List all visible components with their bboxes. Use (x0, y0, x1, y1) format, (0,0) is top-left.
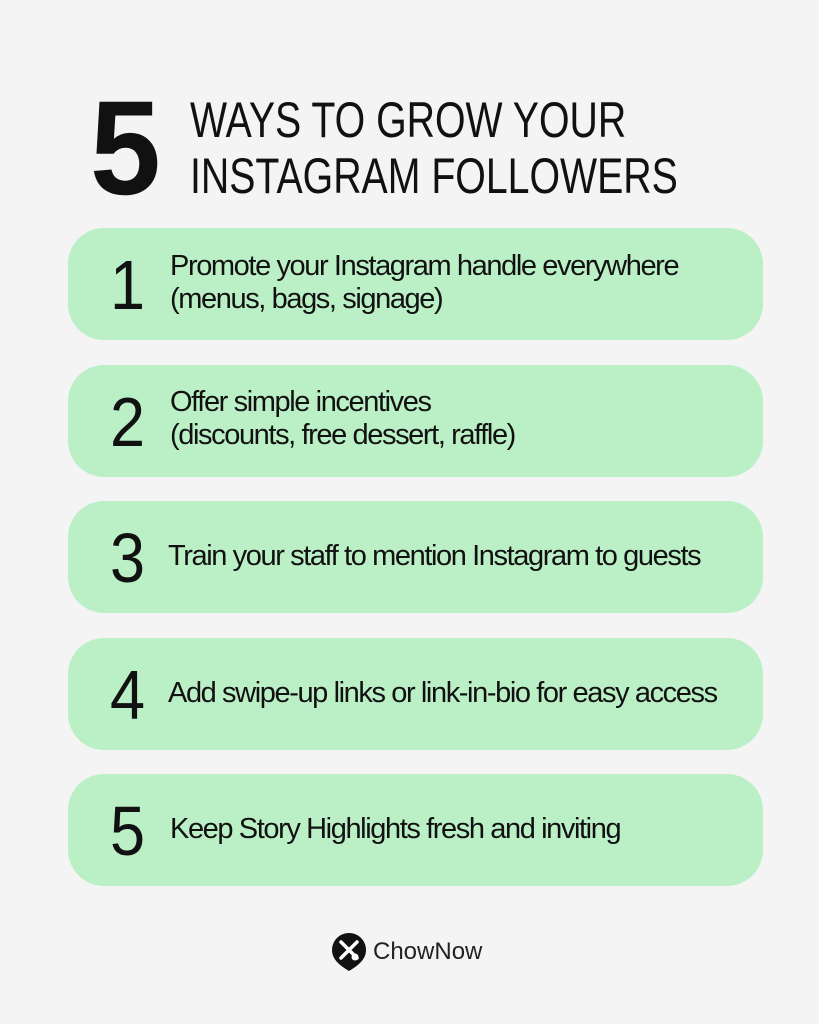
card 3 (68, 501, 763, 613)
text 5: Keep Story Highlights fresh and inviting (170, 813, 620, 845)
text 4: Add swipe-up links or link-in-bio for easy access (168, 677, 717, 709)
text 1: Promote your Instagram handle everywhere (170, 250, 678, 282)
text 2: Offer simple incentives (170, 386, 431, 418)
number 2: 2 (110, 383, 145, 461)
brand name: ChowNow (373, 938, 482, 965)
number 1: 1 (110, 246, 145, 324)
big number 5: 5 (90, 74, 161, 223)
title (90, 74, 678, 223)
logo (332, 933, 482, 971)
card 1 (68, 228, 763, 340)
text 1: (menus, bags, signage) (170, 283, 442, 315)
card 2 (68, 365, 763, 477)
icon: logo pin (332, 933, 366, 971)
text 2 (170, 386, 515, 451)
number 4: 4 (110, 656, 145, 734)
card 5 (68, 774, 763, 886)
text 3: Train your staff to mention Instagram to guests (168, 540, 700, 572)
text 2: (discounts, free dessert, raffle) (170, 419, 515, 451)
title text (190, 92, 678, 204)
card 4 (68, 638, 763, 750)
text 1 (170, 250, 678, 315)
title text: WAYS TO GROW YOUR (190, 92, 626, 148)
number 5: 5 (110, 792, 145, 870)
number 3: 3 (110, 519, 145, 597)
title text: INSTAGRAM FOLLOWERS (190, 148, 678, 204)
